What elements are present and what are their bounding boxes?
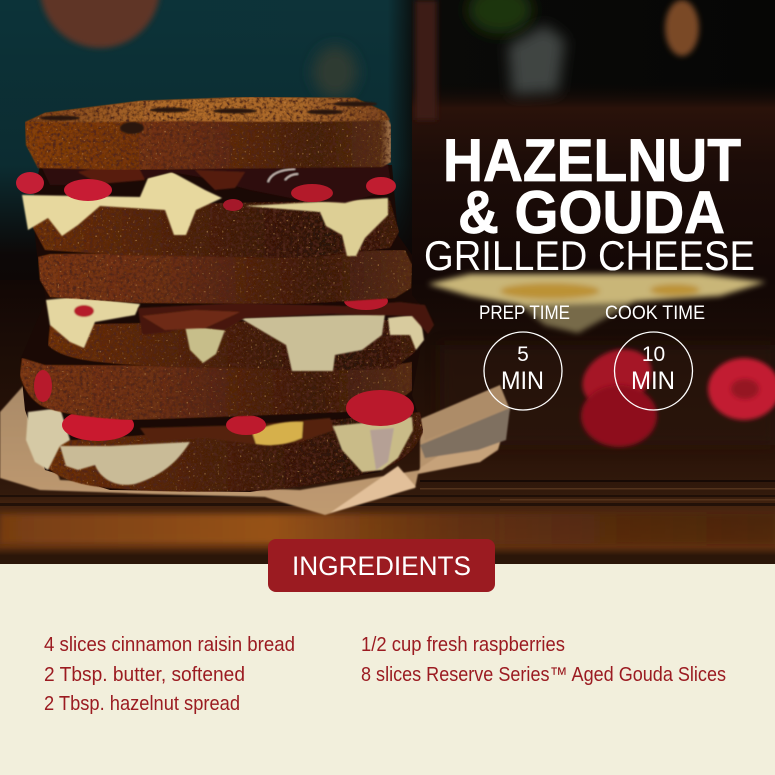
cook time circle [614,332,692,410]
prep time unit: MIN [501,367,544,395]
raspberry bottom right [346,390,414,426]
top layer chocolate [40,160,392,203]
prep time value: 5 [517,343,529,366]
title line 2: & GOUDA [458,179,725,246]
raspberries on table [573,338,775,447]
fourth bread [20,358,412,420]
blurred cheese slice on plate [428,274,766,333]
dark stack silhouette [20,165,434,492]
top layer raspberries [16,172,396,211]
panel: ingredients background [0,564,775,775]
ingredients heading badge [268,539,495,592]
raspberry middle [34,292,388,402]
sandwich stack [16,97,434,492]
second bread [38,250,412,304]
third bread (lower half of second sandwich) [48,320,420,370]
second layer cheese [46,297,424,371]
prep time [479,302,570,410]
title [424,127,755,279]
ingredients list: right column [361,634,726,686]
ingredients list: left column: 4 slices cinnamon raisin bread [44,634,295,656]
background photo scene [0,0,775,564]
ingredients list: right column: 8 slices Reserve Series™ Aged Gouda Slices [361,664,726,686]
ingredients list: left column: 2 Tbsp. butter, softened [44,664,245,686]
ingredients heading badge: INGREDIENTS [292,551,471,581]
ingredients list: left column: 2 Tbsp. hazelnut spread [44,693,240,715]
cook time value: 10 [642,343,665,366]
cook time unit: MIN [631,367,675,395]
title line 1: HAZELNUT [443,127,741,194]
top layer cheese [22,172,388,256]
top bread toasted face [28,97,390,122]
ingredients list: left column [44,634,295,715]
ingredients list: right column: 1/2 cup fresh raspberries [361,634,565,656]
grill char marks [40,102,377,134]
bottom bread [45,412,423,492]
cook time [605,302,705,410]
prep time circle [484,332,562,410]
prep time label: PREP TIME [479,302,570,324]
cook time label: COOK TIME [605,302,705,324]
second layer chocolate [138,302,434,335]
berries bottom layer [62,409,266,441]
top bread side [25,97,391,170]
bottom cheese and chocolate [26,408,413,485]
parchment paper [0,385,510,515]
first sandwich lower bread [32,200,399,258]
